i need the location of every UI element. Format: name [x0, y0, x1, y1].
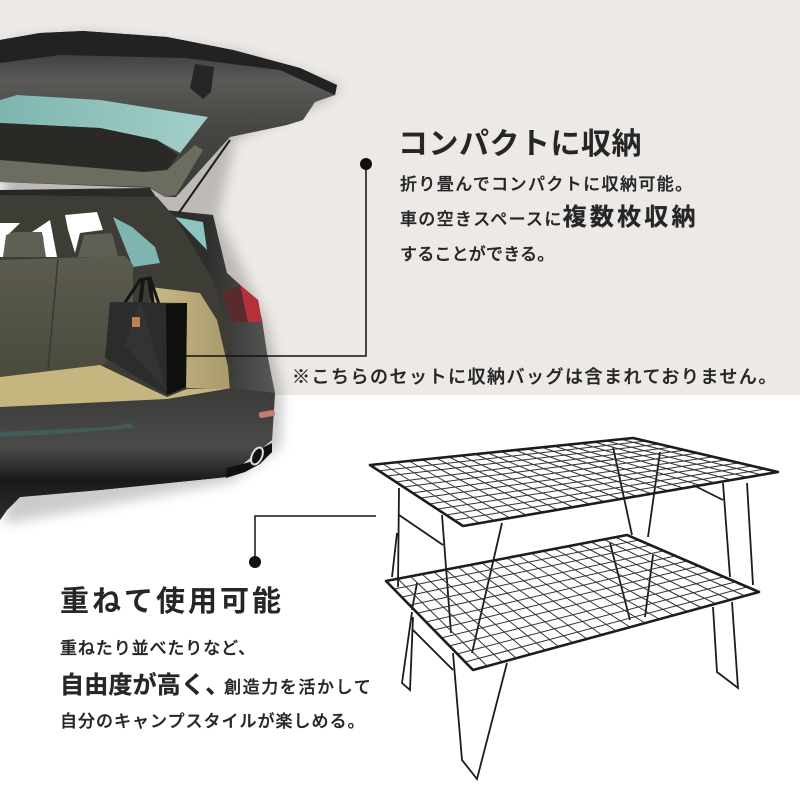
cargo interior: [0, 195, 233, 408]
lower shelf frame: [386, 535, 759, 670]
photo: stacked mesh tables: [370, 438, 778, 779]
legs: [392, 447, 753, 779]
heading: stackable: 重ねて使用可能: [60, 585, 284, 618]
text block: stacking description: 重ねたり並べたりなど、: [60, 639, 256, 658]
rear window glass: [0, 95, 208, 153]
tailgate: [0, 31, 337, 214]
tailgate lining: [0, 145, 203, 197]
text block: stacking description: 創造力を活かして: [224, 678, 372, 697]
car body: [0, 188, 275, 520]
panel: beige background: [0, 0, 800, 395]
text block: storage description: 折り畳んでコンパクトに収納可能。: [400, 175, 694, 194]
tailgate latch: [190, 64, 214, 99]
note: bag not included: ※こちらのセットに収納バッグは含まれておりません。: [292, 367, 778, 387]
text block: stacking description: [60, 639, 372, 731]
text block: storage description: 車の空きスペースに複数枚収納: [400, 204, 699, 231]
reflector: [259, 410, 275, 418]
quarter window: [175, 217, 207, 250]
text block: storage description: [400, 175, 699, 264]
beige floor: [0, 365, 229, 408]
car shadow: [5, 33, 342, 524]
tailgate strut: [178, 140, 230, 214]
lower shelf grid: [394, 537, 747, 666]
upper shelf grid: [378, 439, 765, 523]
side windows: [0, 212, 160, 267]
rear seats: [0, 232, 133, 377]
rear lights: [222, 285, 262, 322]
beige side panel: [150, 287, 230, 390]
callout line: storage: [185, 158, 372, 356]
text block: storage description: することができる。: [400, 244, 554, 264]
exhaust pipe: [226, 443, 272, 478]
text block: stacking description: 自分のキャンプスタイルが楽しめる。: [60, 711, 366, 731]
bag label: [132, 317, 140, 327]
storage bag: [105, 278, 187, 395]
upper shelf frame: [370, 438, 778, 526]
heading: compact storage: コンパクトに収納: [398, 128, 642, 161]
text block: stacking description: 自由度が高く、: [60, 672, 229, 699]
rear lip: [0, 388, 275, 520]
photo: car with open tailgate: [0, 31, 342, 524]
callout line: stacking: [249, 516, 376, 568]
